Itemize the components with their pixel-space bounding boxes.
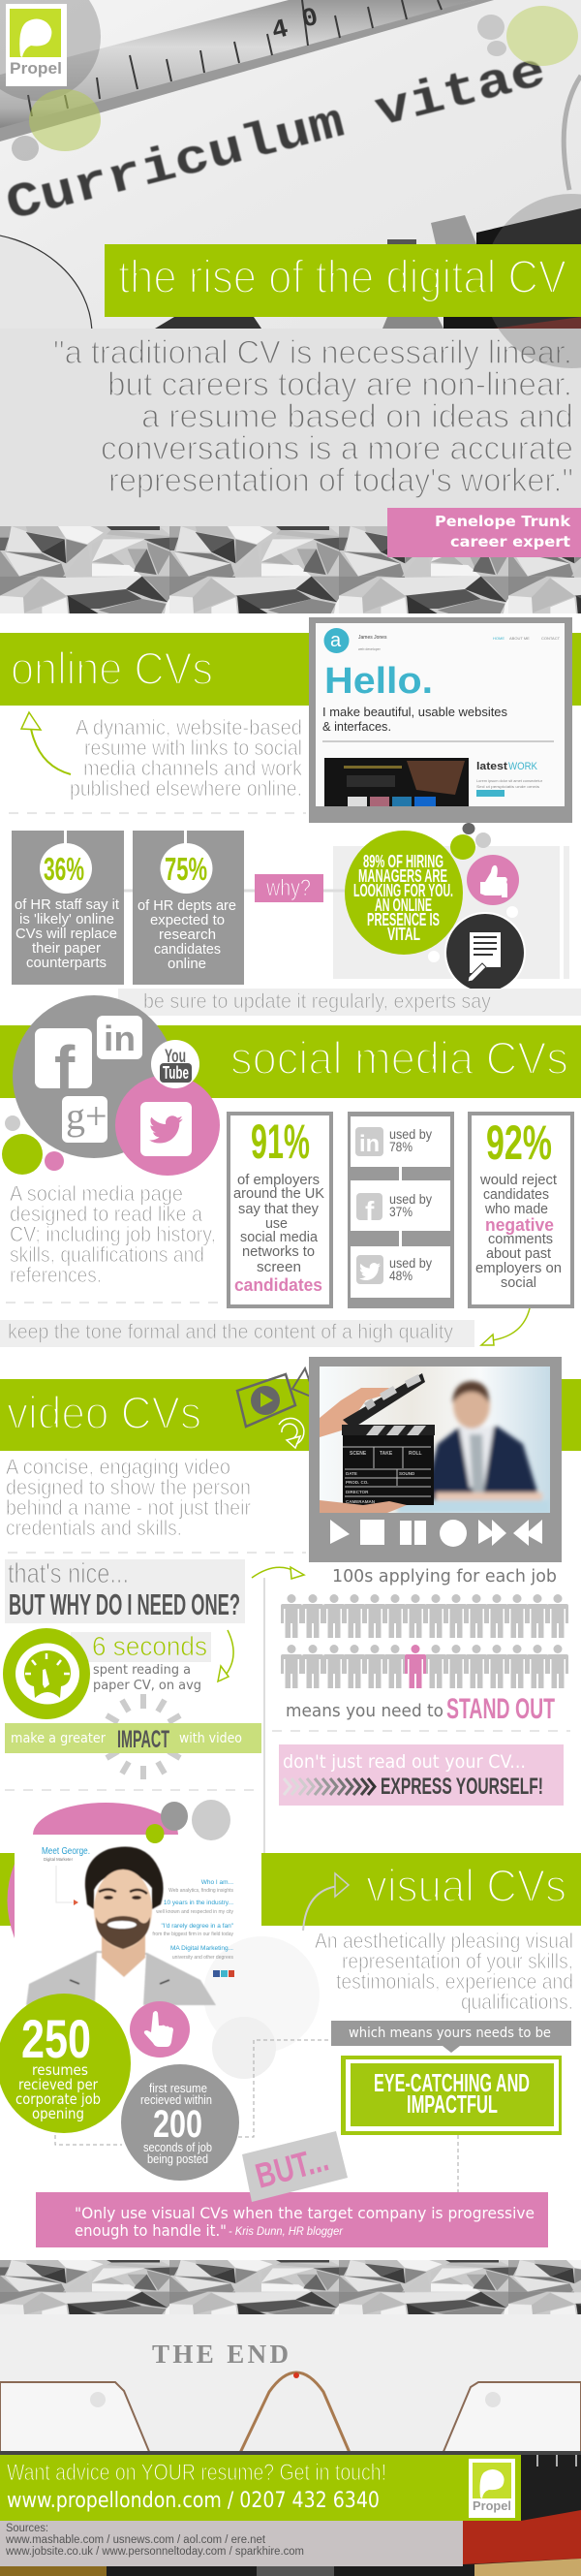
online CVs band: online CVs	[11, 643, 213, 694]
stat circle: 250 resumes	[0, 1994, 131, 2133]
impact bar: make a greater	[11, 1731, 106, 1746]
stat box: 92%: social	[501, 1275, 536, 1291]
faint circles	[203, 1936, 320, 2079]
visual CV example: Meet George: Who I am...	[201, 1879, 233, 1886]
panel: why bubbles: PRESENCE IS	[367, 910, 440, 929]
clapperboard: SCENE	[350, 1451, 367, 1457]
icon: youtube	[151, 1040, 199, 1088]
stat box: 91%: screen	[257, 1260, 301, 1275]
sources panel: Sources:	[6, 2523, 48, 2534]
banner: which means yours needs to be: which means yours needs to be	[349, 2026, 551, 2041]
usage: twitter 48%	[356, 1255, 432, 1284]
panel: why bubbles: AN ONLINE	[375, 895, 432, 915]
bubbles above portrait	[33, 1800, 230, 1843]
online CVs description	[70, 715, 303, 801]
icon: document and pen	[468, 932, 501, 982]
social media description: CV; including job history,	[10, 1222, 216, 1246]
title	[105, 244, 581, 317]
footer logo: Propel: Propel	[473, 2498, 511, 2513]
visual CVs band: visual CVs	[366, 1860, 566, 1911]
stat box: 91%: 91%	[251, 1115, 310, 1169]
clapperboard: DIRECTOR	[346, 1490, 369, 1494]
stat card: 75%: candidates	[154, 941, 221, 958]
icon: twitter	[140, 1102, 192, 1156]
clapperboard: CAMERAMAN	[346, 1499, 375, 1504]
section: visual CVs	[0, 1800, 581, 2247]
panel: why bubbles: VITAL	[387, 925, 420, 944]
stat circle: 250 resumes: opening	[32, 2105, 84, 2122]
stat box: 92%: comments	[488, 1232, 553, 1247]
visual CV example: Meet George: well known and respected in my city	[156, 1909, 233, 1915]
section: online CVs	[0, 617, 581, 1016]
stat circle: 200 seconds: first resume	[149, 2082, 207, 2095]
attribution: Penelope Trunk: Penelope Trunk	[435, 513, 571, 530]
clapperboard: PROD. CO.	[346, 1480, 369, 1485]
clapperboard: TAKE	[380, 1451, 393, 1457]
usage: linkedin 78%: 78%	[389, 1140, 413, 1154]
footer contact band: Want advice on YOUR resume? Get in touch!	[7, 2460, 386, 2486]
online CVs description: resume with links to social	[84, 736, 302, 760]
stat circle: 250 resumes: resumes	[32, 2061, 88, 2079]
icon: youtube: Tube	[163, 1063, 189, 1083]
header photo: typewriter curriculum vitae: 4	[269, 16, 291, 47]
decorative bubbles over header	[0, 0, 581, 368]
visual CVs band	[0, 1853, 581, 1938]
stat box: 91%: social media	[240, 1230, 319, 1245]
video CVs band: video CVs	[7, 1387, 201, 1438]
website screenshot: James Jones	[358, 635, 387, 641]
usage: twitter 48%: used by	[389, 1256, 432, 1271]
panel: why bubbles: MANAGERS ARE	[358, 866, 447, 886]
quote panel: representation of today's worker."	[108, 462, 573, 499]
attribution: Penelope Trunk	[387, 508, 581, 557]
stat box: 92%: candidates	[483, 1187, 549, 1203]
people chart	[281, 1594, 568, 1688]
website screenshot: I make beautiful, usable websites	[322, 705, 507, 719]
header photo: typewriter curriculum vitae	[0, 0, 581, 329]
portrait	[26, 1847, 216, 2005]
website screenshot: ABOUT ME	[509, 636, 530, 641]
usage: linkedin 78%: used by	[389, 1127, 432, 1142]
arrow: up to online CVs	[21, 712, 71, 774]
tip: be sure to update: be sure to update it regularly, experts say	[143, 990, 491, 1013]
social media description: A social media page	[10, 1181, 183, 1206]
pattern strip bottom	[0, 2260, 581, 2315]
quote panel: but careers today are non-linear.	[107, 366, 572, 403]
stat box: 91%: use	[265, 1216, 288, 1232]
stat box: 91%: of employers	[237, 1173, 320, 1188]
social media description: designed to read like a	[10, 1202, 203, 1226]
stat box: 92%: employers on	[475, 1261, 562, 1276]
usage: facebook 37%: used by	[389, 1192, 432, 1207]
footer contact band: www.propellondon.com / 0207 432 6340	[7, 2489, 380, 2513]
visual CV example: Meet George: Web analytics, finding insights	[168, 1888, 233, 1894]
website screenshot: & interfaces.	[322, 719, 391, 734]
blurred interviewee	[397, 1381, 550, 1514]
footer contact band	[0, 2455, 521, 2521]
six seconds panel	[71, 1631, 211, 1693]
video player frame	[309, 1357, 562, 1562]
icon: replay	[279, 1418, 304, 1448]
stat box: 91%: around the UK	[233, 1186, 324, 1202]
panel: why bubbles	[323, 823, 569, 993]
stat box: 92%: 92%	[486, 1115, 552, 1170]
website screenshot: Sed ut perspiciatis unde omnis	[476, 785, 539, 789]
icon: pointing hand	[130, 2001, 190, 2058]
sources panel	[0, 2521, 463, 2566]
stat card: 75%: research	[159, 927, 216, 943]
pattern strip top	[0, 526, 581, 613]
six seconds panel: spent reading a	[93, 1662, 191, 1678]
section: video CVs	[0, 1357, 581, 1853]
logo: Propel	[6, 4, 67, 86]
text: means you need to stand out	[286, 1693, 555, 1725]
online CVs description: published elsewhere online.	[70, 776, 302, 801]
icon: youtube: You	[165, 1047, 186, 1067]
website screenshot: Lorem ipsum dolor sit amet consectetur	[476, 779, 543, 783]
visual CV example: Meet George: "I'd rarely degree in a fan"	[161, 1923, 234, 1930]
icon: facebook	[35, 1028, 92, 1103]
icon: facebook: f	[54, 1033, 76, 1103]
section: social media CVs	[0, 995, 581, 1347]
stat box: 92%: would reject	[479, 1173, 557, 1188]
arrow: six seconds to impact	[218, 1630, 233, 1681]
header photo: typewriter curriculum vitae: 0	[299, 4, 321, 36]
panel: why bubbles: LOOKING FOR YOU.	[353, 881, 453, 900]
stat card: 75%: online	[168, 956, 206, 972]
stat circle: 250 resumes: 250	[21, 2008, 91, 2069]
panel: but why do I need one: BUT WHY DO I NEED ONE?	[9, 1587, 240, 1621]
social media description	[10, 1181, 216, 1287]
stat card: 75%: 75%	[165, 851, 207, 887]
social media band: social media CVs	[230, 1032, 568, 1084]
stat card: 75%: expected to	[150, 912, 225, 928]
icon: impact burst	[102, 1694, 185, 1779]
pink quote bar: enough to handle it."	[75, 2221, 227, 2240]
quote panel	[0, 329, 581, 526]
visual CVs description	[315, 1929, 573, 2014]
video controls	[330, 1520, 542, 1547]
stat card: 36%: of HR staff say it	[15, 896, 120, 913]
visual CV example: Meet George: 10 years in the industry...	[164, 1900, 233, 1906]
stat card: 75%	[133, 831, 244, 985]
icon: speedometer	[3, 1628, 90, 1719]
sources panel: www.jobsite.co.uk / www.personneltoday.com / sparkhire.com	[5, 2546, 304, 2558]
video CVs description	[6, 1455, 251, 1540]
stat circle: 200 seconds: being posted	[147, 2152, 208, 2166]
six seconds panel: 6 seconds	[92, 1631, 207, 1661]
usage: facebook 37%: 37%	[389, 1205, 413, 1219]
usage: twitter 48%: 48%	[389, 1269, 413, 1283]
stat box: 92%: who made	[484, 1202, 548, 1217]
clapperboard	[320, 1373, 435, 1513]
website screenshot: HOME	[493, 636, 505, 641]
stat card: 36%: is 'likely' online	[19, 911, 114, 927]
footer logo: Propel	[469, 2459, 515, 2518]
stat circle: 200 seconds: seconds of job	[143, 2141, 212, 2154]
box: eye-catching and impactful	[341, 2056, 562, 2135]
website screenshot: Hello.	[324, 661, 433, 702]
visual CV example: Meet George: university and other degrees	[172, 1955, 233, 1961]
stat card: 36%: 36%	[44, 851, 84, 887]
visual CV example: Meet George: from the biggest firm in our field today	[152, 1932, 233, 1937]
logo: Propel: Propel	[10, 59, 62, 78]
dashed connectors	[55, 2040, 458, 2192]
stat box: 92%	[470, 1114, 572, 1306]
panel: why bubbles: 89% OF HIRING	[363, 852, 443, 871]
six seconds panel: paper CV, on avg	[93, 1678, 201, 1693]
usage: facebook 37%	[356, 1192, 432, 1226]
panel: but why do I need one: that's nice...	[8, 1558, 129, 1589]
box: eye-catching and impactful: IMPACTFUL	[407, 2089, 498, 2119]
online CVs band	[0, 633, 581, 706]
tag: BUT: BUT...	[251, 2138, 332, 2196]
stat card: 36%: CVs will replace	[15, 926, 117, 942]
icon: linkedin	[97, 1016, 142, 1059]
quote panel: a resume based on ideas and	[141, 398, 573, 435]
impact bar: with video	[179, 1731, 242, 1746]
text: 100s applying: 100s applying for each job	[332, 1566, 557, 1586]
icon: linkedin: in	[104, 1019, 136, 1058]
header photo: typewriter curriculum vitae: Curriculum vitae	[1, 45, 551, 235]
quote panel: "a traditional CV is necessarily linear.	[53, 334, 572, 371]
clapperboard: DATE	[346, 1471, 357, 1476]
website screenshot: WORK	[508, 761, 538, 772]
clapperboard: ROLL	[409, 1451, 422, 1457]
stat box: 91%: say that they	[238, 1202, 320, 1217]
video CVs description: behind a name - not just their	[6, 1495, 251, 1520]
arrow: to visual CVs	[303, 1873, 349, 1931]
icon: google plus: g+	[66, 1094, 107, 1138]
social media description: skills, qualifications and	[10, 1242, 204, 1267]
video CVs description: A concise, engaging video	[6, 1455, 230, 1479]
pink quote bar: - Kris Dunn, HR blogger	[229, 2224, 344, 2238]
online CVs description: A dynamic, website-based	[76, 715, 302, 739]
online CVs description: media channels and work	[83, 756, 303, 780]
stat card: 36%	[12, 831, 124, 985]
website screenshot: a	[330, 630, 342, 651]
panel: but why do I need one	[5, 1558, 245, 1623]
clapperboard: SOUND	[399, 1471, 415, 1476]
arrow: down to tip	[481, 1308, 530, 1345]
website screenshot: CONTACT	[541, 636, 561, 641]
text: means you need to stand out: means you need to	[286, 1701, 443, 1721]
stat circle: 250 resumes: recieved per	[18, 2076, 99, 2093]
quote panel: conversations is a more accurate	[101, 430, 573, 467]
stat box: 91%: candidates	[234, 1275, 322, 1295]
video CVs description: designed to show the person	[6, 1475, 251, 1499]
footer photo: the end	[0, 2314, 581, 2576]
video CVs band	[0, 1379, 581, 1451]
banner: which means yours needs to be	[331, 2021, 571, 2053]
icon: thumbs up	[480, 865, 507, 897]
attribution: Penelope Trunk: career expert	[450, 533, 570, 550]
pink quote bar: "Only use visual CVs when the target company is progressive	[75, 2204, 535, 2222]
stat box: network usage	[348, 1112, 454, 1308]
sources panel: www.mashable.com / usnews.com / aol.com / ere.net	[5, 2534, 266, 2546]
panel: express yourself	[279, 1744, 564, 1806]
stat card: 75%: of HR depts are	[138, 897, 236, 914]
stat circle: 200 seconds	[121, 2064, 239, 2181]
stat box: 91%: networks to	[242, 1244, 315, 1260]
icon: sketched video camera	[237, 1368, 316, 1427]
usage: linkedin 78%	[355, 1127, 432, 1157]
impact bar	[5, 1723, 261, 1753]
visual CV example: Meet George	[26, 1846, 234, 2005]
video CVs description: credentials and skills.	[6, 1516, 182, 1540]
stat card: 36%: their paper	[32, 940, 101, 957]
tip: be sure to update	[118, 989, 581, 1016]
website screenshot	[309, 617, 572, 823]
stat card: 36%: counterparts	[26, 955, 107, 971]
panel: express yourself: don't just read out your CV...	[283, 1751, 526, 1773]
website screenshot: latest	[476, 761, 507, 772]
visual CV example: Meet George: MA Digital Marketing...	[170, 1945, 233, 1952]
why? label: why?	[265, 875, 311, 901]
stat circle: 250 resumes: corporate job	[15, 2090, 101, 2108]
stat box: 92%: about past	[486, 1246, 551, 1262]
visual CV example: Meet George: Digital Marketer	[44, 1857, 73, 1862]
impact bar: IMPACT	[117, 1726, 169, 1753]
arrow: to applicants	[252, 1567, 304, 1579]
connector lines	[124, 890, 349, 892]
social media band	[0, 1025, 581, 1098]
footer photo: the end: THE END	[152, 2340, 289, 2369]
stat box: 92%: negative	[485, 1215, 554, 1235]
stat circle: 200 seconds: recieved within	[140, 2093, 212, 2107]
usage: facebook 37%: f	[365, 1196, 375, 1226]
usage: linkedin 78%: in	[359, 1131, 380, 1157]
social icons cluster	[2, 995, 220, 1176]
pink quote bar	[36, 2192, 548, 2247]
website screenshot: web developer	[358, 647, 382, 651]
social media description: references.	[10, 1263, 102, 1287]
tip: keep the tone formal: keep the tone formal and the content of a high quality	[8, 1321, 453, 1343]
stat box: 91%	[229, 1114, 331, 1306]
stat circle: 200 seconds: 200	[153, 2103, 202, 2146]
visual CV example: Meet George: Meet George.	[42, 1846, 90, 1857]
chevrons	[284, 1778, 375, 1795]
